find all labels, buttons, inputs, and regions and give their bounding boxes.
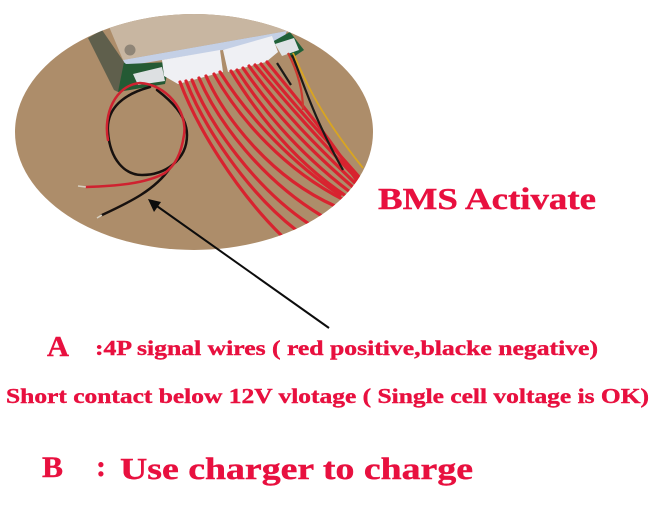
connector: main left	[162, 50, 223, 84]
circuit board left corner	[118, 62, 166, 92]
colon for B: :	[96, 450, 106, 483]
yellow, black and red signal wires at right	[293, 53, 363, 168]
black activation wire	[102, 87, 187, 215]
label B: B	[42, 451, 63, 484]
arrow pointing to signal wires	[148, 199, 329, 328]
blue plate edge	[123, 31, 287, 66]
line A description: :4P signal wires ( red positive,blacke negative)	[95, 336, 598, 360]
bare wire tips	[78, 186, 102, 218]
screw	[124, 44, 136, 56]
red balance wires	[180, 62, 360, 236]
connector: left signal	[133, 67, 165, 85]
board side edge	[88, 30, 124, 92]
metal cover plate	[110, 14, 286, 60]
circuit board right corner	[272, 32, 304, 58]
cardboard background	[15, 14, 373, 250]
label A: A	[47, 331, 69, 363]
short contact instruction: Short contact below 12V vlotage ( Single cell voltage is OK)	[6, 384, 649, 408]
line B description: Use charger to charge	[120, 451, 473, 486]
title: BMS Activate	[378, 182, 596, 216]
red activation wire	[86, 83, 184, 187]
connector: right signal	[275, 38, 299, 56]
photo: BMS board with wires on cardboard	[15, 14, 373, 250]
connector: main right	[223, 36, 278, 72]
